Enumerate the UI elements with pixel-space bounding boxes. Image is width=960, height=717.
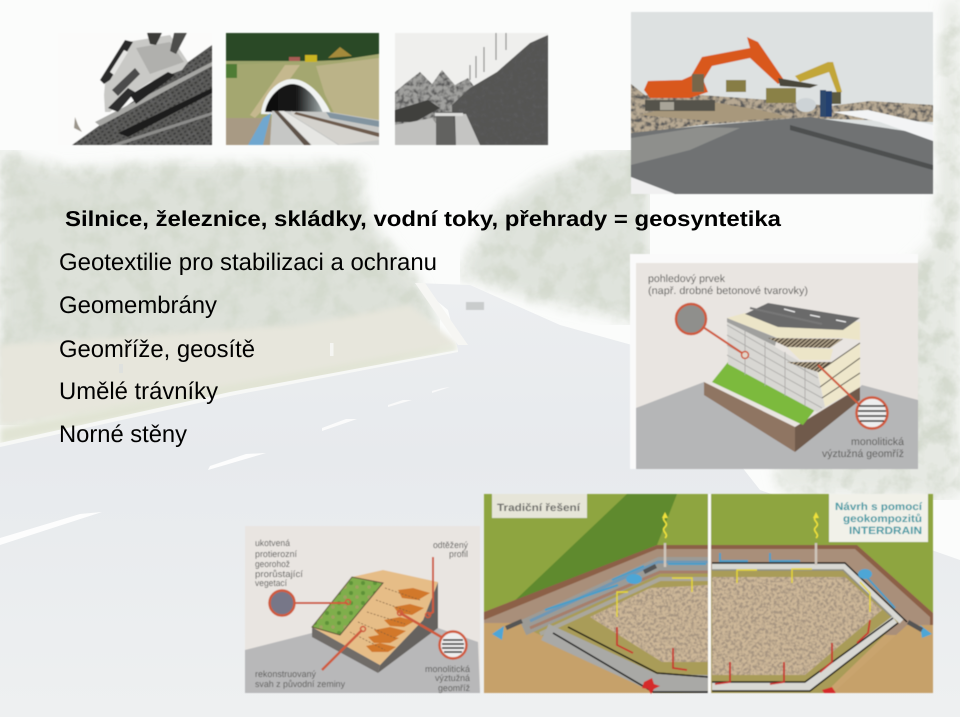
water arrows xyxy=(545,553,895,610)
label box: INTERDRAIN design xyxy=(829,494,928,542)
divider xyxy=(708,494,711,693)
road surface xyxy=(745,303,860,330)
labels: svah z původní zeminy xyxy=(255,679,345,689)
left drainage lining xyxy=(523,562,708,692)
labels: rekonstruovaný xyxy=(255,669,316,679)
floor xyxy=(636,382,918,469)
excavator, orange xyxy=(644,37,818,111)
labels: profil xyxy=(449,549,468,559)
slope surface xyxy=(312,570,438,665)
right drainage lining xyxy=(712,563,907,691)
block sides xyxy=(312,582,438,673)
callout: lighter profile xyxy=(426,557,433,618)
labels: výztužná xyxy=(435,673,470,683)
diagram: landfill cross-section comparison xyxy=(484,494,933,694)
label box: INTERDRAIN design: geokompozitů xyxy=(843,513,922,525)
grass xyxy=(484,494,933,613)
labels xyxy=(648,273,904,460)
workers xyxy=(796,90,832,117)
heading: Silnice, železnice, skládky, vodní toky, přehrady = geosyntetika xyxy=(65,207,782,231)
diagram: reconstructed slope xyxy=(245,526,480,693)
floor xyxy=(245,628,480,693)
bottom soil xyxy=(484,623,653,693)
pipes xyxy=(506,566,922,630)
diagram: reinforced retaining wall xyxy=(630,254,918,469)
text block: list of geosynthetics: Umělé trávníky xyxy=(59,378,218,405)
waste body xyxy=(530,570,900,693)
callout: geogrid xyxy=(818,365,888,428)
blue outlets xyxy=(492,569,932,640)
gravel fill, left xyxy=(590,585,708,662)
labels: výztužná geomříž xyxy=(822,448,904,460)
photo: black and white railway embankment xyxy=(395,33,548,145)
cover soil xyxy=(484,545,933,630)
label box: INTERDRAIN design: INTERDRAIN xyxy=(849,525,922,537)
excavator, yellow xyxy=(726,62,842,104)
callout: reconstructed slope xyxy=(322,626,366,670)
text block: list of geosynthetics xyxy=(59,249,437,448)
text block: list of geosynthetics: Geomembrány xyxy=(59,292,217,319)
labels xyxy=(255,538,470,693)
text block: list of geosynthetics: Geotextilie pro stabilizaci a ochranu xyxy=(59,249,437,276)
labels: ukotvená xyxy=(255,538,290,548)
photo: locomotive above reinforced slope xyxy=(58,33,212,145)
labels: vegetací xyxy=(255,578,287,588)
gas vents xyxy=(662,512,819,567)
vegetated mat xyxy=(312,577,383,635)
text block: list of geosynthetics: Geomříže, geosítě xyxy=(59,336,255,363)
reinforced fill layers xyxy=(727,313,860,407)
block wall xyxy=(727,318,825,412)
locomotive xyxy=(100,33,188,112)
labels: pohledový prvek xyxy=(648,273,726,285)
labels: (např. drobné betonové tvarovky) xyxy=(648,285,808,297)
gravel fill, right xyxy=(712,577,882,675)
label box: traditional solution: Tradiční řešení xyxy=(497,502,581,514)
labels: odtěžený xyxy=(433,540,468,550)
yellow leachate arrows xyxy=(617,569,870,617)
photo: excavators laying geogrid xyxy=(631,12,933,194)
labels: monolitická xyxy=(851,436,904,448)
labels: monolitická xyxy=(425,664,470,674)
callout: geogrid xyxy=(398,610,466,658)
label box: INTERDRAIN design: Návrh s pomocí xyxy=(835,501,923,513)
labels: georohož xyxy=(255,559,290,569)
text block: list of geosynthetics: Norné stěny xyxy=(59,421,187,448)
labels: prorůstající xyxy=(255,569,304,579)
labels: protierozní xyxy=(255,549,297,559)
soil base xyxy=(704,382,860,452)
callout: erosion mat xyxy=(270,590,350,616)
label box: traditional solution xyxy=(492,494,587,518)
callout: facing element xyxy=(676,304,748,358)
green facing xyxy=(712,362,817,425)
labels: geomříž xyxy=(438,683,470,693)
soil lenses xyxy=(366,588,430,652)
red arrows xyxy=(617,620,870,684)
photo: railway tunnel portal xyxy=(226,33,379,145)
